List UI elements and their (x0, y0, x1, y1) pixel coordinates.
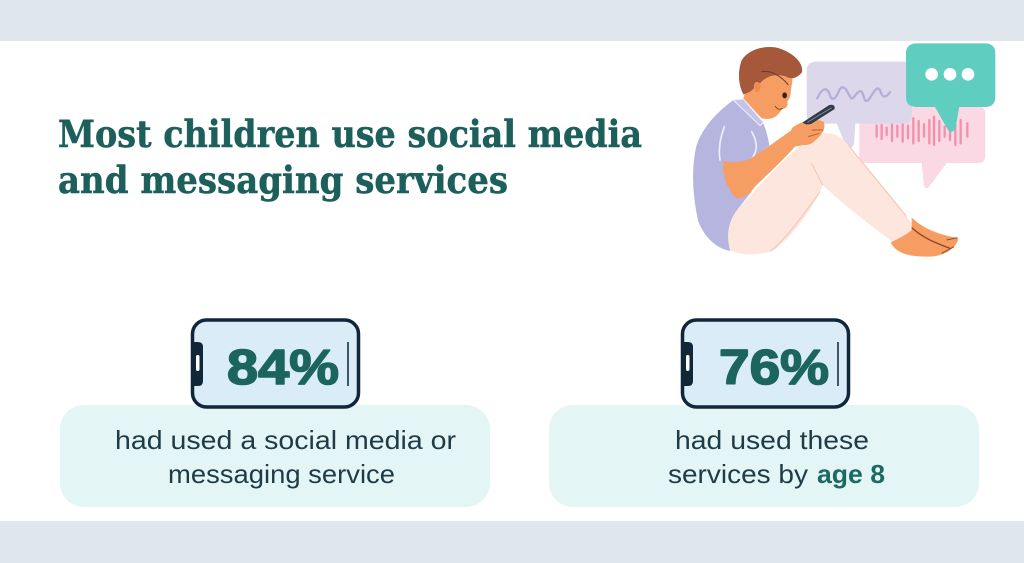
hair (739, 47, 802, 94)
title: and messaging services (58, 158, 508, 202)
phone (803, 105, 835, 124)
top band (0, 0, 1024, 41)
icon: phone with 84% (192, 320, 358, 407)
trousers (728, 133, 912, 254)
panel: 76% stat (549, 320, 979, 507)
ear (754, 82, 761, 92)
title: Most children use social media (58, 112, 642, 156)
icon: phone with 84%: 84% (227, 341, 339, 395)
child figure (693, 47, 958, 257)
caption card left (60, 405, 490, 507)
caption card right: had used these (675, 425, 869, 455)
caption card right: services by (668, 459, 808, 489)
title (58, 112, 642, 202)
caption card right (549, 405, 979, 507)
icon: phone with 76% (682, 320, 848, 407)
smile (775, 106, 783, 109)
hands (790, 120, 824, 145)
caption card left: had used a social media or (115, 425, 456, 455)
panel: 84% stat (60, 320, 490, 507)
icon: teal chat bubble (906, 43, 995, 132)
icon: phone with 76%: 76% (719, 341, 829, 395)
caption card right: age 8 (817, 459, 885, 489)
neck and face (743, 68, 793, 119)
illustration: child using phone with chat bubbles (693, 43, 995, 257)
foot (891, 218, 958, 257)
shirt (693, 99, 769, 251)
arm (723, 130, 812, 198)
icon: pink audio bubble (859, 107, 985, 188)
bottom band (0, 521, 1024, 563)
caption card left: messaging service (168, 459, 395, 489)
eye (782, 92, 787, 98)
icon: lavender wave bubble (807, 62, 912, 148)
